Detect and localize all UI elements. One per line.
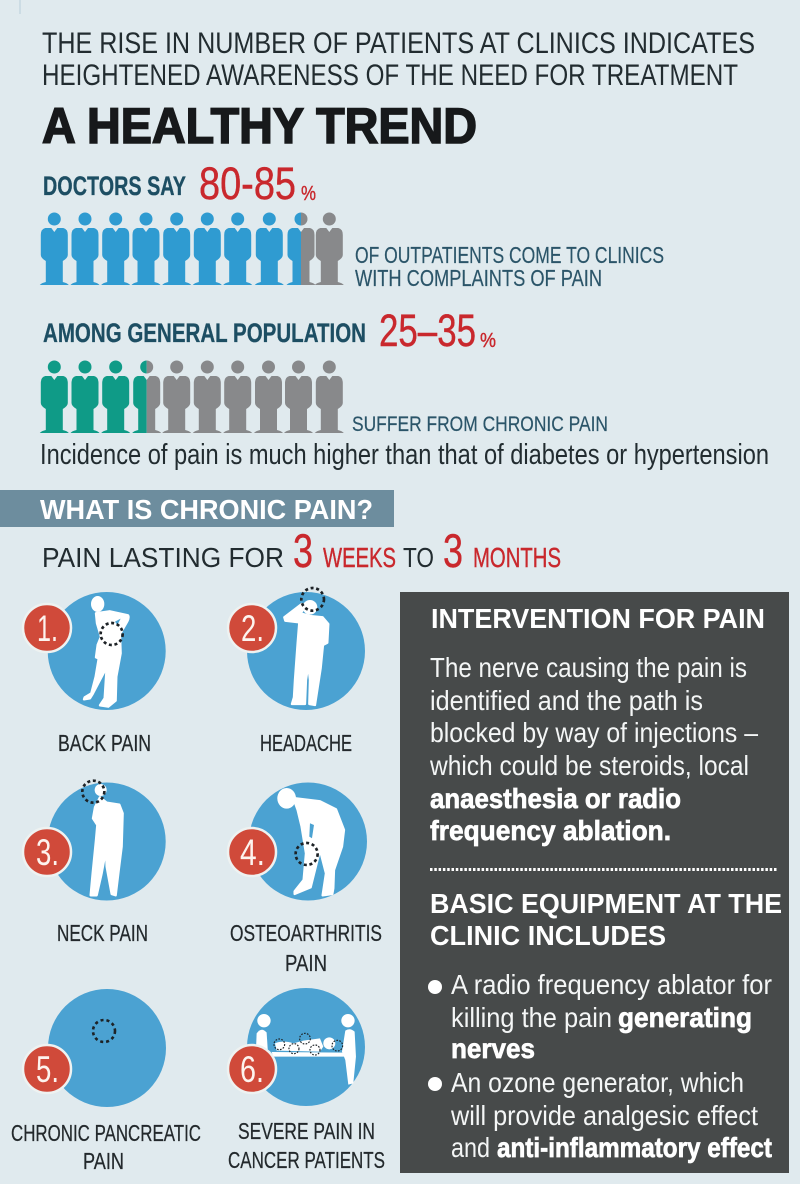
statistic 25-35%: 25–35: [379, 305, 476, 356]
label: [230, 920, 382, 976]
section: doctors say: [40, 158, 664, 291]
label: NECK PAIN: [57, 920, 148, 946]
icon: figure holding back: [84, 596, 129, 707]
label: CHRONIC PANCREATIC: [11, 1120, 201, 1146]
label: BACK PAIN: [58, 730, 151, 756]
bullet 2: An ozone generator, which: [451, 1067, 744, 1098]
badge 2: [228, 604, 276, 652]
intervention body text: frequency ablation.: [430, 815, 671, 846]
bullet 1: killing the pain: [451, 1002, 612, 1033]
badge 3: 3.: [36, 832, 59, 873]
item 4: osteoarthritis pain: [228, 782, 382, 976]
panel heading: intervention: INTERVENTION FOR PAIN: [431, 603, 765, 634]
panel heading: equipment: [430, 888, 782, 951]
bullet 1: A radio frequency ablator for: [451, 969, 772, 1000]
label: OSTEOARTHRITIS: [230, 920, 382, 946]
item 6: severe pain in cancer patients: [228, 988, 385, 1173]
bullet 1: nerves: [451, 1033, 535, 1064]
pain duration line: [42, 524, 561, 577]
badge 6: 6.: [240, 1049, 264, 1090]
title block: [42, 27, 755, 154]
pain duration line: PAIN LASTING FOR: [42, 542, 284, 573]
outpatients caption: OF OUTPATIENTS COME TO CLINICS: [355, 242, 664, 268]
badge 1: 1.: [37, 608, 58, 649]
badge 4: 4.: [240, 832, 265, 873]
label: HEADACHE: [260, 730, 352, 756]
intervention body text: which could be steroids, local: [429, 750, 749, 781]
item 5: chronic pancreatic pain: [11, 989, 201, 1174]
outpatients caption: [355, 242, 664, 291]
intro line: [42, 27, 755, 92]
badge 3: [23, 828, 71, 876]
main heading: A HEALTHY TREND: [42, 98, 477, 154]
statistic 80-85%: %: [301, 183, 316, 205]
population heading: AMONG GENERAL POPULATION: [43, 318, 366, 348]
label: PAIN: [83, 1148, 124, 1174]
doctors heading: DOCTORS SAY: [43, 171, 186, 201]
intervention body text: identified and the path is: [430, 685, 703, 716]
badge 5: 5.: [36, 1049, 59, 1090]
panel heading: equipment: BASIC EQUIPMENT AT THE: [430, 888, 782, 919]
bullet 1: generating: [618, 1002, 752, 1033]
pain duration line: MONTHS: [473, 542, 561, 573]
intervention body text: anaesthesia or radio: [430, 783, 681, 814]
outpatients caption: WITH COMPLAINTS OF PAIN: [355, 265, 602, 291]
badge 5: [23, 1045, 71, 1093]
pictogram: ten people, 25-35 percent green: [40, 360, 344, 433]
bullet 2: and: [451, 1132, 490, 1163]
icon: dashed pain marker: [93, 1020, 115, 1042]
bullet 2: will provide analgesic effect: [450, 1100, 758, 1131]
panel: intervention and equipment: [400, 592, 789, 1173]
panel heading: equipment: CLINIC INCLUDES: [430, 920, 666, 951]
pain duration line: WEEKS: [323, 542, 396, 573]
bullet 2: [428, 1067, 772, 1163]
statistic 25-35%: %: [480, 330, 496, 352]
bullet 1: [428, 969, 772, 1064]
item 1: back pain: [23, 592, 166, 756]
chronic pain caption: SUFFER FROM CHRONIC PAIN: [352, 413, 608, 436]
item 3: neck pain: [23, 781, 166, 946]
icon: figure bent over holding knee: [277, 788, 344, 895]
section: general population: [40, 305, 608, 436]
intervention body text: The nerve causing the pain is: [430, 652, 747, 683]
pain duration line: TO: [403, 542, 434, 573]
label: [11, 1120, 201, 1174]
section banner: WHAT IS CHRONIC PAIN?: [40, 494, 373, 525]
badge 6: [228, 1045, 276, 1093]
intervention body text: blocked by way of injections –: [430, 717, 758, 748]
pain duration line: 3: [293, 524, 313, 577]
label: PAIN: [285, 950, 327, 976]
icon: figure holding head: [284, 588, 328, 705]
pictogram: ten people, 80-85 percent blue: [40, 212, 344, 285]
item 2: headache: [228, 588, 365, 756]
badge 1: [23, 604, 71, 652]
pain duration line: 3: [443, 524, 463, 577]
label: CANCER PATIENTS: [228, 1147, 385, 1173]
statistic 80-85%: 80-85: [199, 158, 296, 209]
icon: stretcher with patient: [255, 1014, 356, 1085]
label: [228, 1118, 385, 1173]
label: SEVERE PAIN IN: [238, 1118, 375, 1144]
intervention body text: [429, 652, 758, 846]
badge 2: 2.: [241, 608, 264, 649]
badge 4: [228, 828, 276, 876]
icon: figure holding neck: [82, 781, 123, 895]
